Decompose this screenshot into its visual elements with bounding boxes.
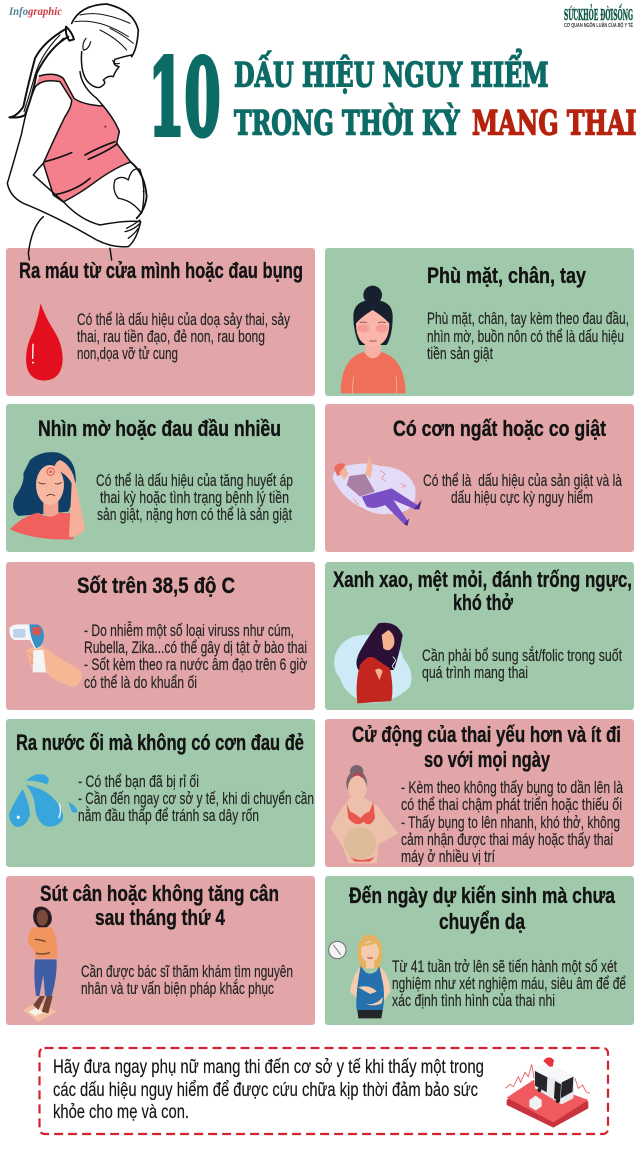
heading: weight loss: Sút cân hoặc không tăng cân	[40, 881, 279, 906]
heading: weight loss	[40, 881, 279, 930]
icon: blood drop	[26, 303, 63, 381]
text: amniotic fluid description: nằm đầu thấp để tránh sa dây rốn	[78, 806, 259, 825]
text: weight loss description	[81, 963, 293, 998]
icon: woman with headache	[10, 452, 85, 539]
text: fever description: có thể là do khuẩn ối	[84, 674, 197, 692]
heading: pale and tired	[333, 567, 632, 615]
text: fever description: Rubella, Zika...có thể gây dị tật ở bào thai	[84, 639, 307, 657]
icon: blonde pregnant woman	[350, 935, 391, 1018]
heading: past due date	[349, 883, 615, 934]
text: blurred vision description: Có thể là dấu hiệu của tăng huyết áp	[96, 472, 293, 490]
illustration: pregnant woman line art	[7, 4, 147, 260]
panel: amniotic fluid	[6, 719, 315, 867]
panel: bleeding or abdominal pain	[6, 248, 315, 396]
text: blurred vision description: sản giật, nặng hơn có thể là sản giật	[97, 506, 292, 524]
heading: bleeding: Ra máu từ cửa mình hoặc đau bụng	[19, 258, 303, 283]
heading: reduced fetal movement	[352, 722, 621, 772]
logo: Sức khỏe & Đời sống	[564, 4, 634, 29]
icon: pregnant woman in underwear	[331, 765, 398, 863]
text: reduced fetal movement description: máy ở nhiều vị trí	[401, 848, 495, 866]
text: bleeding description: Có thể là dấu hiệu của doạ sảy thai, sảy	[77, 311, 291, 329]
text: fever description: - Sốt kèm theo ra nước âm đạo trên 6 giờ	[84, 656, 307, 674]
text: fever description	[84, 621, 307, 692]
text: amniotic fluid description: - Cần đến ngay cơ sở y tế, khi di chuyển cần	[78, 790, 314, 808]
panel: blurred vision or headache	[6, 404, 315, 552]
text: pale description: quá trình mang thai	[422, 664, 528, 682]
title: 10	[148, 36, 220, 160]
text: amniotic fluid description: - Có thể bạn đã bị rỉ ối	[78, 773, 199, 791]
panel: reduced fetal movement	[325, 719, 634, 867]
text: fever description: - Do nhiễm một số loại viruss như cúm,	[84, 621, 294, 640]
text: swelling description: tiền sản giật	[427, 345, 493, 363]
panel: fainting or seizures	[325, 404, 634, 552]
text: blurred vision description	[96, 472, 293, 524]
text: weight loss description: Cần được bác sĩ thăm khám tìm nguyên	[81, 963, 293, 981]
heading: past due date: chuyển dạ	[439, 909, 525, 934]
icon: woman with swollen face	[341, 286, 406, 393]
heading: blurred vision: Nhìn mờ hoặc đau đầu nhiều	[38, 416, 281, 441]
callout text: Hãy đưa ngay phụ nữ mang thi đến cơ sở y tế khi thấy một trong	[53, 1057, 484, 1078]
title	[148, 36, 636, 160]
callout text: các dấu hiệu nguy hiểm để được cứu chữa kịp thời đảm bảo sức	[53, 1080, 478, 1101]
icon: ambulance on red platform	[506, 1057, 590, 1128]
text: pale description	[422, 646, 622, 682]
icon: wall clock	[329, 941, 346, 959]
panel: fever	[6, 562, 315, 710]
callout	[40, 1048, 608, 1134]
panel: swelling	[325, 248, 634, 396]
heading: pale and tired: khó thở	[453, 590, 513, 615]
heading: swelling: Phù mặt, chân, tay	[427, 263, 586, 288]
icon: woman short of breath	[334, 623, 411, 703]
text: weight loss description: nhân và tư vấn biện pháp khắc phục	[81, 979, 274, 998]
title line 2: TRONG THỜI KỲ	[234, 102, 460, 144]
panel: weight loss	[6, 876, 315, 1025]
callout text	[53, 1057, 484, 1123]
icon: pregnant woman on scale	[23, 906, 57, 1022]
text: swelling description	[427, 310, 629, 363]
panel: pale, tired, palpitations	[325, 562, 634, 710]
panel: past due date	[325, 876, 634, 1025]
text: past due date description: xác định tình hình của thai nhi	[392, 992, 555, 1010]
text: past due date description	[392, 958, 626, 1010]
label: Infographic: Infographic	[8, 6, 62, 18]
text: bleeding description: thai, rau tiền đạo, đẻ non, rau bong	[77, 328, 265, 346]
text: blurred vision description: thai kỳ hoặc tình trạng bệnh lý tiền	[100, 489, 289, 507]
text: reduced fetal movement description	[401, 779, 624, 866]
text: bleeding description	[77, 311, 291, 363]
heading: fever: Sốt trên 38,5 độ C	[77, 573, 235, 598]
icon: water splashes	[9, 774, 78, 827]
icon: hand holding infrared thermometer	[9, 624, 82, 687]
callout text: khỏe cho mẹ và con.	[53, 1102, 189, 1123]
text: amniotic fluid description	[78, 773, 314, 825]
heading: weight loss: sau tháng thứ 4	[95, 905, 225, 930]
heading: reduced fetal movement: so với mọi ngày	[424, 747, 550, 772]
text: bleeding description: non,dọa vỡ tử cung	[77, 345, 178, 363]
text: fainting description	[423, 472, 623, 507]
icon: woman having a seizure	[333, 456, 422, 526]
heading: amniotic fluid: Ra nước ối mà không có cơn đau đẻ	[16, 730, 304, 755]
